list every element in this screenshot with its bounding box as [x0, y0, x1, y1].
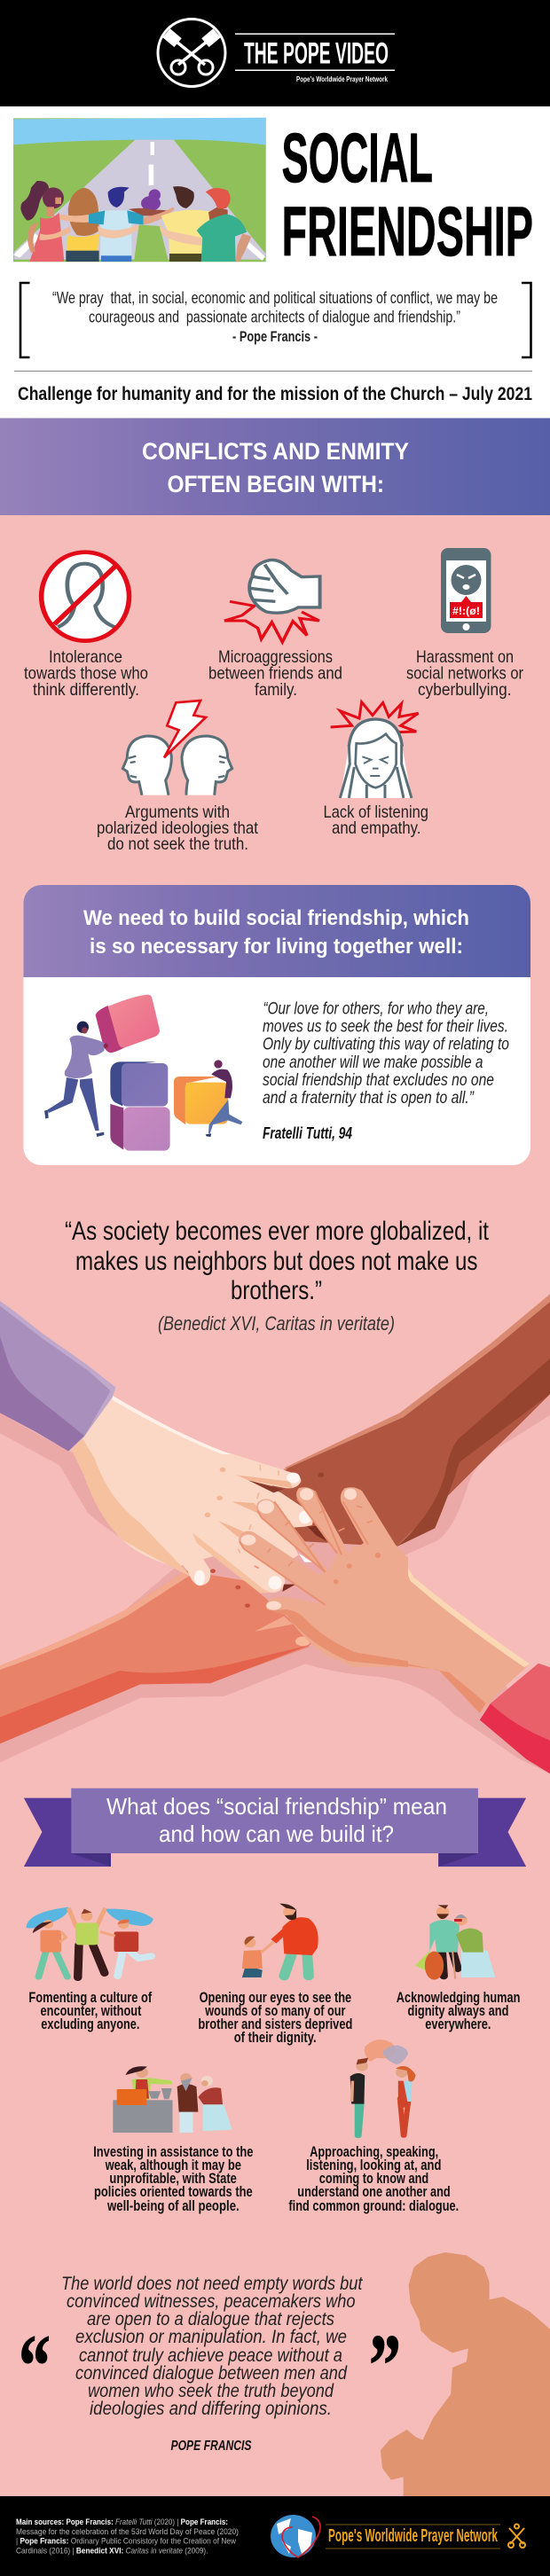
quote body: convinced dialogue between men and	[75, 2362, 348, 2384]
text: arguments: polarized ideologies that	[97, 818, 259, 838]
text: opening our eyes: of their dignity.	[234, 2030, 317, 2046]
text: investing in assistance: policies oriented towards the	[94, 2184, 253, 2200]
illustration: soup kitchen	[113, 2066, 232, 2133]
person: purple hair	[129, 189, 175, 224]
quote: Fratelli Tutti: one another will we make possible a	[263, 1053, 483, 1072]
illustration: man and elderly woman	[415, 1905, 495, 1980]
peach hand fingers	[239, 1487, 408, 1667]
text: intolerance	[24, 647, 148, 700]
red sleeve	[480, 1664, 550, 1773]
illustration: dancing friends	[27, 1907, 153, 1977]
wordmark	[235, 34, 395, 83]
text: intolerance: towards those who	[24, 663, 148, 683]
text: harassment	[406, 647, 523, 700]
panel header	[23, 885, 530, 977]
text: approaching and dialogue	[288, 2144, 459, 2214]
text: opening our eyes: wounds of so many of our	[205, 2003, 346, 2019]
icon: fist	[224, 560, 320, 642]
title	[282, 118, 533, 270]
quote: Benedict XVI: (Benedict XVI, Caritas in veritate)	[158, 1312, 395, 1335]
text: culture of encounter	[28, 1990, 153, 2032]
gaps between fingers	[282, 1525, 330, 1592]
white title area	[0, 106, 550, 419]
text: microaggressions: family.	[255, 680, 297, 700]
quote: Fratelli Tutti: “Our love for others, for who they are,	[263, 1000, 489, 1018]
quote: Fratelli Tutti	[263, 1000, 509, 1142]
illustration: man helping a child	[242, 1904, 318, 1977]
red hand details	[210, 1569, 311, 1658]
quote: Fratelli Tutti: Fratelli Tutti, 94	[263, 1124, 352, 1142]
quote body: are open to a dialogue that rejects	[87, 2308, 334, 2329]
illustration: stacked hands	[0, 1294, 550, 1773]
text: human dignity: dignity always and	[408, 2003, 508, 2019]
figure: man carrying block	[206, 1060, 242, 1137]
quote body: cannot truly achieve peace without a	[79, 2345, 342, 2366]
text: microaggressions	[208, 647, 342, 700]
icon: globe and heart	[271, 2515, 320, 2557]
text: microaggressions: Microaggressions	[218, 647, 333, 667]
text: arguments: Arguments with	[125, 803, 230, 822]
quote: Fratelli Tutti: and a fraternity that is open to all.”	[263, 1089, 475, 1108]
text: approaching and dialogue: find common ground: dialogue.	[288, 2198, 459, 2214]
text: culture of encounter: excluding anyone.	[41, 2016, 139, 2032]
text: human dignity: everywhere.	[425, 2016, 491, 2032]
quote body: convinced witnesses, peacemakers who	[67, 2290, 356, 2312]
text: human dignity	[397, 1990, 520, 2032]
figure: woman lifting block	[44, 1022, 108, 1137]
text: harassment: Harassment on	[416, 647, 514, 667]
text: intolerance: think differently.	[33, 680, 139, 700]
footer	[0, 2496, 550, 2576]
panel: build social friendship	[23, 885, 530, 1165]
closing quote: Pope Francis	[19, 2273, 401, 2454]
text: intolerance: Intolerance	[49, 647, 122, 667]
icon: arguing heads	[122, 701, 232, 795]
text: investing in assistance	[93, 2144, 254, 2214]
person: yellow top	[66, 188, 99, 262]
illustration: friends on a road	[13, 118, 266, 262]
arm shadows	[0, 1394, 550, 1773]
prayer quote with brackets: - Pope Francis -	[232, 328, 318, 345]
pale hand fingers	[160, 1454, 313, 1593]
quote: Fratelli Tutti: social friendship that excludes no one	[263, 1071, 494, 1090]
text: lack of listening	[323, 803, 428, 838]
quote body: The world does not need empty words but	[61, 2273, 363, 2294]
text: arguments	[97, 803, 259, 854]
text: lack of listening: and empathy.	[332, 818, 420, 838]
purple sleeve	[0, 1301, 115, 1452]
quote: Benedict XVI: brothers.”	[231, 1276, 322, 1305]
title: SOCIAL	[282, 118, 433, 197]
ribbon heading	[24, 1789, 526, 1867]
icon: phone	[441, 548, 491, 633]
icon: phone: #!:(ø!	[452, 605, 480, 617]
sources: Message for the celebration of the 53rd World Day of Peace (2020)	[16, 2527, 239, 2537]
person: green shirt	[197, 188, 251, 262]
ribbon heading: and how can we build it?	[159, 1820, 394, 1847]
text: investing in assistance: well-being of all people.	[106, 2198, 240, 2214]
sources	[16, 2517, 239, 2556]
icon: closing quotation mark: ”	[369, 2316, 401, 2415]
wordmark: Pope's Worldwide Prayer Network	[296, 74, 388, 83]
panel: what social friendship means	[27, 1904, 520, 2214]
person: yellow shirt	[160, 186, 210, 262]
peach wrist	[350, 1546, 530, 1713]
banner: conflicts and enmity	[0, 419, 550, 515]
sources: Main sources: Pope Francis: Fratelli Tutti (2020) | Pope Francis:	[16, 2517, 228, 2527]
banner: conflicts and enmity: CONFLICTS AND ENMITY	[142, 438, 409, 465]
icon: crossed keys logo	[158, 20, 225, 87]
text: approaching and dialogue: Approaching, speaking,	[310, 2144, 438, 2160]
person: red dress	[20, 181, 71, 262]
quote body: exclusion or manipulation. In fact, we	[75, 2326, 347, 2347]
illustration: Pope silhouette	[381, 2252, 550, 2496]
text: opening our eyes: brother and sisters deprived	[198, 2016, 352, 2032]
text: approaching and dialogue: listening, looking at, and	[306, 2157, 441, 2173]
text: opening our eyes	[198, 1990, 352, 2046]
sources: | Pope Francis: Ordinary Public Consistory for the Creation of New	[16, 2536, 236, 2547]
pale arm	[72, 1396, 273, 1578]
text: arguments: do not seek the truth.	[107, 834, 248, 854]
quote body: ideologies and differing opinions.	[90, 2398, 332, 2419]
prayer quote with brackets	[20, 283, 530, 357]
attribution: POPE FRANCIS	[170, 2439, 252, 2454]
text: investing in assistance: weak, although it may be	[105, 2157, 241, 2173]
bottom left arm	[0, 1570, 312, 1743]
header: The Pope Video	[0, 0, 550, 106]
icon: gold keys	[508, 2524, 525, 2548]
text: approaching and dialogue: coming to know and	[319, 2171, 428, 2187]
person: blue shirt	[60, 187, 144, 262]
text: microaggressions: between friends and	[208, 663, 342, 683]
text: harassment: cyberbullying.	[418, 680, 511, 700]
text: lack of listening: Lack of listening	[323, 803, 428, 822]
text: opening our eyes: Opening our eyes to see the	[200, 1990, 351, 2006]
sources: Cardinals (2016) | Benedict XVI: Caritas in veritate (2009).	[16, 2547, 208, 2556]
illustration: two people in dialogue	[350, 2040, 416, 2135]
text: harassment: social networks or	[406, 663, 523, 683]
text: investing in assistance: unprofitable, with State	[109, 2171, 237, 2187]
banner: conflicts and enmity: OFTEN BEGIN WITH:	[167, 471, 384, 497]
panel: causes of conflict	[24, 548, 523, 854]
icon: opening quotation mark: “	[19, 2316, 51, 2415]
panel header: is so necessary for living together well:	[90, 935, 463, 959]
wordmark: THE POPE VIDEO	[244, 37, 389, 71]
panel header: We need to build social friendship, which	[83, 906, 469, 930]
ribbon heading: What does “social friendship” mean	[106, 1793, 447, 1820]
quote body	[61, 2273, 363, 2419]
text: investing in assistance: Investing in assistance to the	[93, 2144, 254, 2160]
text: approaching and dialogue: understand one another and	[297, 2184, 451, 2200]
text: culture of encounter: encounter, without	[41, 2003, 142, 2019]
illustration: people stacking blocks	[44, 995, 242, 1151]
icon: woman covering ears	[331, 702, 419, 798]
brown arm	[267, 1294, 550, 1546]
text: culture of encounter: Fomenting a culture of	[28, 1990, 153, 2006]
quote: Benedict XVI	[65, 1217, 490, 1335]
quote body: women who seek the truth beyond	[88, 2380, 334, 2401]
prayer quote with brackets: courageous and passionate architects of dialogue and friendship.”	[89, 309, 460, 326]
icon: intolerance	[42, 552, 130, 641]
